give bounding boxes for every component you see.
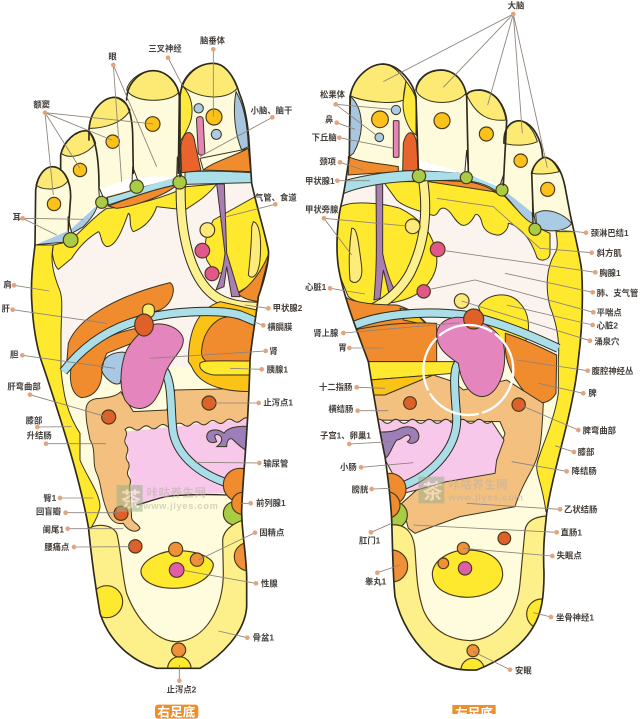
- label: 额窦: [33, 99, 153, 195]
- liver flexure point: [102, 410, 116, 424]
- label: 胃: 胃: [338, 343, 347, 353]
- orange zone under toes: [106, 178, 174, 198]
- third toe: [467, 90, 507, 187]
- label: 心脏2: [507, 305, 618, 331]
- heart zone: [478, 295, 528, 353]
- thyroid band: [343, 171, 499, 194]
- label: 甲状旁腺: [305, 205, 407, 255]
- watermark on right foot: 茶: [121, 489, 141, 512]
- small intestine: [125, 418, 250, 506]
- label: 前列腺1: [240, 498, 286, 508]
- gonad oval: [141, 551, 213, 588]
- label: 额窦: 额窦: [33, 99, 50, 109]
- label: 眼: [108, 51, 157, 182]
- toe gaps and nerve points: [412, 150, 541, 235]
- thyroid band: [107, 177, 180, 205]
- label: 胆: 胆: [10, 349, 19, 359]
- intestine lower edge: [137, 495, 227, 505]
- label: 脾弯曲部: [520, 405, 617, 435]
- label: 膝部: 膝部: [26, 415, 43, 425]
- label: 甲状腺2: 甲状腺2: [273, 303, 303, 313]
- lower big toe orange: [345, 297, 427, 330]
- right foot sole diagram: [2, 35, 303, 719]
- label: 平喘点: [430, 280, 622, 318]
- label: 直肠1: [413, 525, 582, 538]
- label: 横膈膜: 横膈膜: [267, 322, 293, 332]
- label: 下丘脑: [312, 133, 393, 148]
- label: 横结肠: [328, 404, 388, 414]
- label: 耳: 耳: [13, 212, 21, 222]
- label: 性腺: [185, 571, 278, 589]
- ear zones: [71, 206, 98, 233]
- right foot outline: [31, 63, 269, 668]
- adrenal point: [464, 309, 484, 329]
- label: 失眠点: 失眠点: [557, 551, 582, 561]
- watermark on right foot: [117, 485, 219, 512]
- watermark on right foot: www.jlyes.com: [142, 501, 219, 511]
- label: 胸腺1: [445, 251, 621, 278]
- toe base wavy zone: [383, 182, 550, 260]
- label: 安眠: [473, 652, 532, 676]
- label: 腹腔神经丛: [517, 360, 633, 376]
- gallbladder: [102, 352, 127, 384]
- lumbago point: [129, 540, 142, 553]
- left foot sole diagram: [305, 0, 638, 719]
- label: 颈项: [319, 156, 363, 170]
- label: 失眠点: [463, 548, 582, 561]
- label: 降结肠: [512, 462, 597, 476]
- label: 平喘点: 平喘点: [597, 308, 622, 318]
- label: 坐骨神经1: [533, 613, 594, 623]
- thyroid curve: [181, 187, 258, 307]
- label: 肾: [150, 346, 278, 358]
- label: 心脏2: 心脏2: [597, 321, 618, 331]
- label: 肾: 肾: [269, 346, 278, 356]
- label: 固精点: 固精点: [259, 528, 285, 538]
- label: 脾: 脾: [588, 388, 597, 398]
- label: 止泻点1: 止泻点1: [263, 398, 293, 408]
- label: 气管、食道: [220, 193, 297, 218]
- label: 乙状结肠: 乙状结肠: [564, 505, 597, 515]
- label: 止泻点2: 止泻点2: [167, 685, 197, 695]
- trachea and esophagus: [216, 184, 240, 297]
- label: 心脏1: 心脏1: [305, 282, 327, 292]
- label: 臀1: [43, 493, 93, 503]
- spleen: [505, 333, 557, 403]
- label: 输尿管: 输尿管: [263, 458, 288, 468]
- label: 腹腔神经丛: 腹腔神经丛: [592, 366, 633, 376]
- label: 肝: [2, 304, 107, 323]
- label: 耳: [13, 212, 83, 235]
- ball of foot yellow zone: [205, 197, 272, 293]
- label: 乙状结肠: [467, 503, 597, 515]
- label: 十二指肠: 十二指肠: [319, 382, 352, 392]
- fourth toe: [504, 121, 543, 217]
- label: 气管、食道: 气管、食道: [255, 193, 297, 203]
- pancreas stripes: [360, 362, 460, 380]
- heel band: [89, 520, 246, 668]
- label: 固精点: [198, 528, 285, 560]
- label: 肾上腺: [313, 323, 460, 338]
- label: 止泻点2: [167, 665, 197, 695]
- heel side zones: [96, 585, 124, 618]
- thyroid curve: [352, 182, 425, 315]
- label: 胆: [10, 349, 115, 368]
- stomach: [353, 323, 437, 362]
- label: 涌泉穴: 涌泉穴: [594, 336, 620, 346]
- label: 直肠1: 直肠1: [561, 528, 582, 538]
- second toe: [127, 71, 179, 177]
- shoulder and arm strip: [30, 245, 100, 530]
- label: 肝弯曲部: [7, 381, 108, 417]
- left foot outline: [337, 64, 582, 670]
- uterus zone: [207, 426, 250, 452]
- ureter: [405, 362, 460, 485]
- label: 肺、支气管: [505, 273, 638, 298]
- small intestine: [375, 419, 504, 493]
- label: 颈项: 颈项: [319, 156, 337, 166]
- label: 斜方肌: 斜方肌: [597, 248, 622, 258]
- label: 输尿管: [195, 458, 288, 468]
- trachea and esophagus: [374, 184, 396, 300]
- label: 小脑、脑干: [200, 105, 292, 157]
- sole base: [342, 174, 573, 640]
- solar plexus dashed ring: [423, 325, 513, 415]
- label: 下丘脑: 下丘脑: [312, 133, 337, 143]
- label: 肺、支气管: 肺、支气管: [597, 288, 638, 298]
- little toe: [532, 157, 572, 223]
- kidney: [121, 324, 183, 408]
- label: 胸腺1: 胸腺1: [599, 268, 621, 278]
- diaphragm band: [63, 311, 258, 372]
- label: 前列腺1: 前列腺1: [256, 498, 286, 508]
- third toe: [89, 97, 133, 190]
- label: 松果体: 松果体: [320, 89, 346, 99]
- label: 阑尾1: 阑尾1: [43, 524, 64, 534]
- label: 大脑: [383, 0, 547, 168]
- big toe: [180, 63, 251, 177]
- colon: [372, 375, 543, 533]
- label: 三叉神经: [148, 44, 183, 86]
- label: 小脑、脑干: 小脑、脑干: [251, 105, 292, 115]
- label: 膝部: [26, 415, 72, 429]
- uterus and ovary zone: [375, 427, 419, 458]
- toe base orange: [423, 170, 476, 178]
- label: 膀胱: 膀胱: [352, 485, 369, 495]
- colon: [86, 388, 250, 531]
- gonad oval: [432, 550, 503, 597]
- colon points: [404, 397, 416, 409]
- little toe: [35, 167, 71, 245]
- second toe: [416, 70, 468, 173]
- label: 腰痛点: [44, 542, 133, 552]
- label: 大脑: 大脑: [508, 0, 524, 10]
- label: 肝: 肝: [2, 304, 11, 314]
- big toe: [348, 64, 418, 175]
- label: 回盲瓣: 回盲瓣: [36, 506, 62, 516]
- ball of foot yellow zone: [333, 203, 437, 304]
- label: 子宫1、卵巢1: [320, 430, 392, 446]
- caption: 右足底: 右足底: [157, 704, 196, 719]
- label: 腰痛点: 腰痛点: [44, 542, 70, 552]
- label: 甲状腺1: [305, 176, 370, 186]
- label: 睾丸1: [365, 565, 400, 586]
- label: 降结肠: 降结肠: [572, 466, 597, 476]
- label: 肾上腺: 肾上腺: [313, 328, 339, 338]
- fourth toe: [61, 131, 100, 230]
- reflex zones clipped to the sole: [32, 170, 268, 668]
- label: 安眠: 安眠: [515, 666, 532, 676]
- label: 鼻: 鼻: [325, 115, 333, 125]
- watermark on left foot: 咔咕养生网: [448, 477, 508, 491]
- watermark on left foot: [418, 477, 524, 503]
- label: 骨盆1: 骨盆1: [253, 633, 274, 643]
- label: 膀胱: [352, 485, 392, 495]
- adrenal points: [143, 304, 154, 317]
- label: 肛门1: 肛门1: [359, 535, 381, 545]
- label: 升结肠: [27, 431, 106, 446]
- label: 肩: 肩: [3, 279, 12, 289]
- watermark on left foot: www.jlyes.com: [447, 493, 524, 503]
- label: 坐骨神经1: 坐骨神经1: [556, 613, 594, 623]
- label: 肩: [3, 279, 49, 291]
- label: 颈淋巴结1: 颈淋巴结1: [591, 228, 629, 238]
- label: 脑垂体: [200, 35, 226, 117]
- label: 止泻点1: [210, 398, 293, 408]
- label: 松果体: [320, 89, 392, 135]
- label: 横结肠: 横结肠: [328, 404, 353, 414]
- reflex zones clipped to the sole: [338, 170, 582, 670]
- label: 斜方肌: [437, 198, 622, 258]
- insomnia point: [498, 532, 511, 545]
- label: 脾: [538, 383, 597, 398]
- label: 涌泉穴: [462, 301, 620, 346]
- kidney: [437, 317, 505, 397]
- heel band: [370, 516, 587, 700]
- label: 甲状腺1: 甲状腺1: [305, 176, 335, 186]
- heart and thymus points: [200, 223, 215, 237]
- heel side zones: [376, 550, 408, 582]
- label: 小肠: 小肠: [340, 462, 357, 472]
- pancreas and spleen area: [188, 302, 257, 392]
- label: 臀1: 臀1: [43, 493, 57, 503]
- arm strip: [537, 232, 587, 512]
- prostate and bladder: [222, 502, 242, 525]
- label: 膝部: [555, 446, 595, 457]
- watermark on left foot: 茶: [423, 480, 443, 503]
- label: 回盲瓣: [36, 506, 120, 516]
- appendix point: [114, 506, 128, 520]
- toe base wavy zone: [52, 184, 217, 269]
- label: 十二指肠: [319, 382, 385, 392]
- label: 甲状腺2: [245, 303, 303, 313]
- thymus and asthma points: [405, 219, 420, 234]
- label: 肛门1: [359, 523, 392, 545]
- label: 膝部: 膝部: [578, 447, 595, 457]
- toe gaps and nerve points: [63, 157, 186, 247]
- label: 阑尾1: [43, 524, 123, 534]
- label: 骨盆1: [218, 631, 274, 643]
- anus and bladder: [381, 502, 407, 528]
- label: 子宫1、卵巢1: 子宫1、卵巢1: [320, 430, 371, 440]
- label: 睾丸1: 睾丸1: [365, 576, 387, 586]
- diarrhea point 1: [202, 396, 216, 410]
- label: 胃: [338, 343, 383, 353]
- sole base: [46, 176, 254, 641]
- label: 心脏1: [305, 282, 365, 294]
- watermark on right foot: 咔咕养生网: [147, 486, 207, 500]
- label: 肝弯曲部: 肝弯曲部: [7, 381, 41, 391]
- label: 小肠: [340, 462, 413, 472]
- label: 眼: 眼: [108, 51, 117, 61]
- label: 胰腺1: 胰腺1: [267, 365, 288, 375]
- label: 胰腺1: [230, 365, 288, 375]
- label: 性腺: 性腺: [261, 579, 278, 589]
- label: 三叉神经: 三叉神经: [148, 44, 182, 54]
- ear zones: [503, 185, 533, 223]
- label: 脾弯曲部: 脾弯曲部: [583, 425, 617, 435]
- diaphragm band: [355, 313, 558, 348]
- liver: [67, 283, 173, 363]
- label: 颈淋巴结1: [560, 228, 629, 238]
- label: 甲状旁腺: 甲状旁腺: [305, 205, 339, 215]
- label: 脑垂体: 脑垂体: [200, 35, 226, 45]
- ureter: [164, 370, 225, 482]
- label: 鼻: [325, 115, 355, 129]
- label: 升结肠: 升结肠: [27, 431, 52, 441]
- label: 横膈膜: [253, 322, 293, 332]
